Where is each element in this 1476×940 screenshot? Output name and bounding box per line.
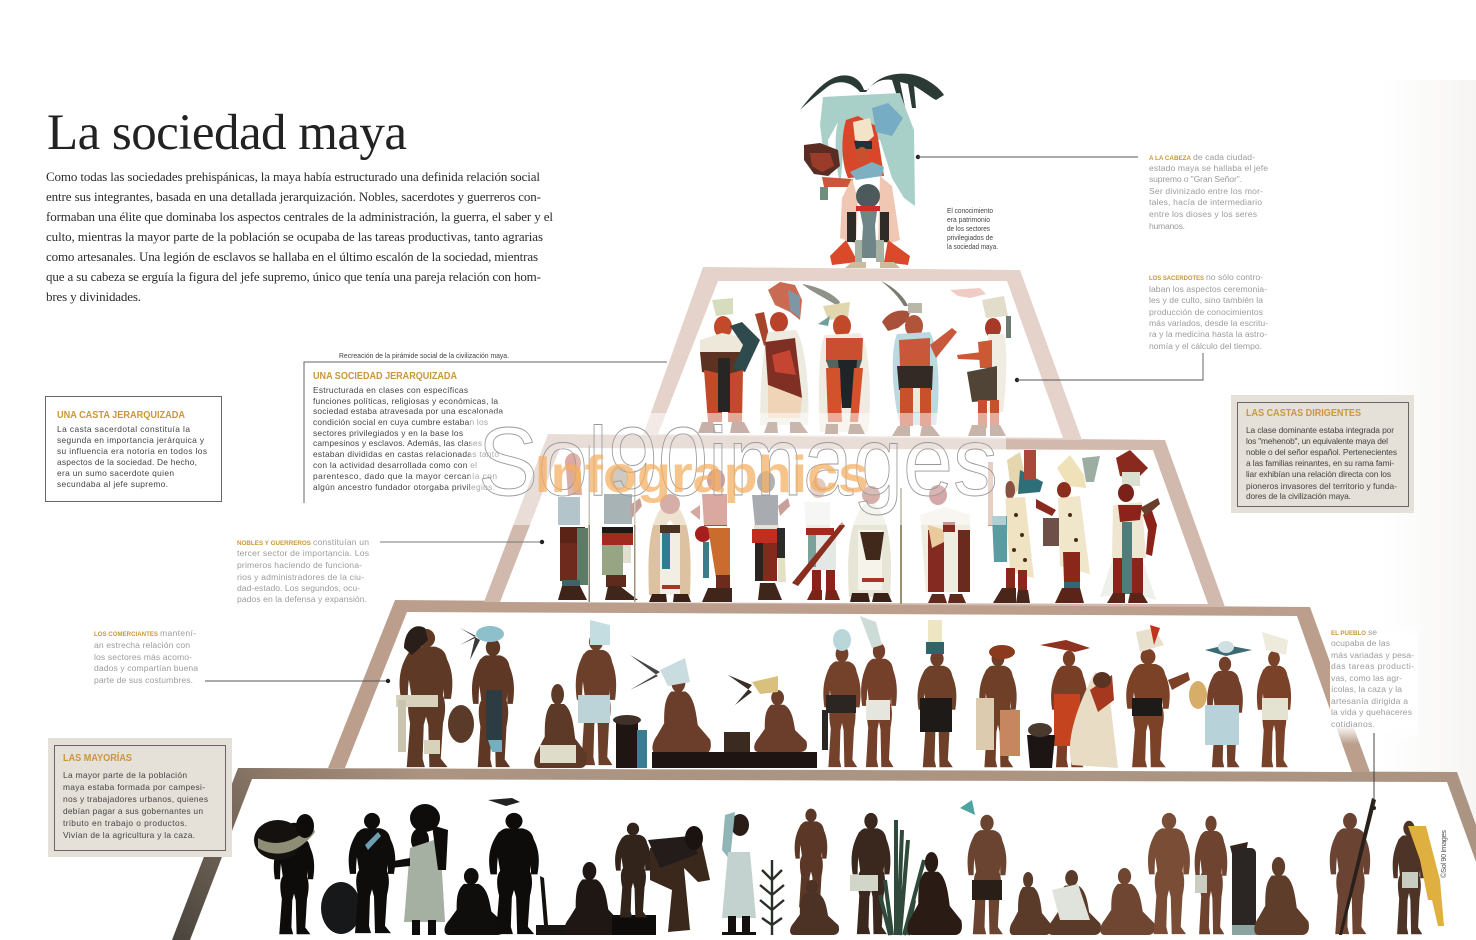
standing man 5 — [1126, 625, 1190, 767]
nobles and warriors row — [558, 445, 1160, 604]
panel: las castas dirigentes: los "mehenob", un equivalente maya del — [1246, 436, 1388, 446]
callout: a la cabeza: estado maya se hallaba el jefe — [1149, 163, 1268, 173]
standing man 6 — [1189, 641, 1252, 767]
merchant 2 — [460, 626, 514, 767]
callout: el pueblo: EL PUEBLO — [1331, 630, 1366, 637]
callout: los sacerdotes: laban los aspectos ceremonia- — [1149, 284, 1267, 294]
caption: conocimiento: privilegiados de — [947, 233, 993, 242]
common people row — [254, 798, 1444, 935]
intro paragraph: que a su cabeza se erguía la figura del jefe supremo, único que tenía una pareja relación con hom- — [46, 269, 541, 284]
watermark: Infographics: Infographics — [535, 446, 869, 504]
callout: a la cabeza: A LA CABEZA — [1149, 155, 1191, 162]
copyright credit: ©Sol 90 Images — [1439, 830, 1448, 878]
callout: los sacerdotes: LOS SACERDOTES — [1149, 275, 1204, 282]
caption: conocimiento: era patrimonio — [947, 215, 990, 224]
seated man 2 — [1100, 868, 1155, 935]
caption: conocimiento — [947, 206, 998, 251]
panel: una casta jerarquizada: era un sumo sacerdote quien — [57, 468, 174, 478]
noble 1 — [558, 445, 590, 602]
corn plant — [760, 860, 784, 935]
agave plant — [880, 820, 924, 935]
kneeling man at stele — [1254, 857, 1309, 935]
panel: una casta jerarquizada: secundaba al jefe supremo. — [57, 479, 168, 489]
woman with red skirt — [1040, 640, 1090, 767]
standing man 7 — [1257, 632, 1291, 767]
callout: nobles y guerreros — [237, 537, 544, 604]
priest 2 — [755, 282, 808, 433]
panel: las mayorías: nos y trabajadores urbanos, quienes — [63, 794, 208, 804]
panel: las castas dirigentes: noble o del señor español. Pertenecientes — [1246, 447, 1397, 457]
panel: las castas dirigentes: liar exhibían una relación directa con los — [1246, 469, 1391, 479]
panel: una sociedad jerarquizada: condición social en cuya cumbre estaban los — [313, 417, 488, 427]
callout: el pueblo: ocupaba de las — [1331, 638, 1390, 648]
panel: una sociedad jerarquizada: Estructurada en clases con específicas — [313, 385, 468, 395]
panel: las mayorías: Vivían de la agricultura y la caza. — [63, 830, 195, 840]
panel: las castas dirigentes: pioneros invasores del territorio y funda- — [1246, 481, 1397, 491]
standing man with bowl — [1195, 816, 1248, 934]
callout: los sacerdotes: ra y la medicina hasta la astro- — [1149, 329, 1267, 339]
woman with jar — [388, 804, 448, 935]
priests row — [698, 281, 1011, 436]
bending porter — [648, 826, 710, 932]
panel: las mayorías: LAS MAYORÍAS — [63, 751, 132, 764]
callout: nobles y guerreros: primeros haciendo de funciona- — [237, 560, 362, 570]
porter with basket — [254, 814, 315, 934]
callout: a la cabeza: Ser divinizado entre los mor- — [1149, 186, 1263, 196]
priest 4 — [881, 281, 957, 436]
panel: una sociedad jerarquizada: estaban divididas en castas relacionadas tanto — [313, 449, 499, 459]
panel: una sociedad jerarquizada: algún ancestro fundador otorgaba privilegios. — [313, 482, 495, 492]
callout: a la cabeza — [916, 152, 1268, 231]
callout: el pueblo: más variadas y pesa- — [1331, 650, 1414, 660]
man and crouching farmer — [790, 809, 839, 935]
standing man 2 — [860, 616, 897, 767]
kneeling farmer — [907, 852, 962, 935]
callout: los sacerdotes: más variados, desde la escritu- — [1149, 318, 1268, 328]
panel: las mayorías — [48, 738, 232, 857]
panel: una sociedad jerarquizada: UNA SOCIEDAD JERARQUIZADA — [313, 371, 457, 382]
intro paragraph: culto, mientras la mayor parte de la población se ocupaba de las tareas productivas, tanto agrarias — [46, 229, 543, 244]
panel: una sociedad jerarquizada: sociedad estaba atravesada por una escalonada — [313, 406, 503, 416]
callout: el pueblo: artesanía dirigida a — [1331, 696, 1408, 706]
standing man 4 — [976, 645, 1020, 767]
callout: el pueblo: se — [1368, 627, 1377, 637]
panel: las castas dirigentes: dores de la civilización maya. — [1246, 491, 1351, 501]
man with sack — [321, 813, 395, 934]
noble 4 — [690, 469, 732, 602]
priest 3 — [802, 284, 870, 434]
callout: el pueblo: das tareas producti- — [1331, 661, 1414, 671]
intro paragraph: entre sus integrantes, basada en una detallada jerarquización. Nobles, sacerdotes y guerreros con- — [46, 189, 541, 204]
stele — [1232, 848, 1258, 935]
callout: el pueblo — [1330, 622, 1418, 810]
panel: las mayorías: tributo en trabajo o productos. — [63, 818, 187, 828]
noble 11 — [1100, 450, 1160, 603]
man from behind — [960, 800, 1006, 934]
callout: los sacerdotes: producción de conocimientos — [1149, 307, 1263, 317]
intro paragraph: formaban una élite que dominaba los aspectos centrales de la administración, la guerra, el saber y el — [46, 209, 553, 224]
noble 3 — [648, 494, 691, 602]
panel: una sociedad jerarquizada — [304, 351, 667, 503]
noble 8 — [920, 485, 970, 603]
callout: nobles y guerreros: pados en la defensa y expansión. — [237, 594, 367, 604]
watermark: Sol90images: Sol90images — [478, 407, 998, 516]
noble 5 — [752, 471, 790, 600]
callout: los comerciantes — [94, 628, 390, 685]
panel: una sociedad jerarquizada: con la actividad desarrollada como con el — [313, 460, 477, 470]
panel: una casta jerarquizada: La casta sacerdotal constituía la — [57, 424, 190, 434]
panel: una sociedad jerarquizada: Recreación de la pirámide social de la civilización maya. — [339, 351, 509, 360]
man with hoe — [488, 798, 568, 935]
callout: los sacerdotes — [1015, 272, 1268, 382]
watermark veil — [470, 413, 1006, 525]
panel: las mayorías: La mayor parte de la población — [63, 770, 187, 780]
callout: el pueblo: vas, como las agr- — [1331, 673, 1402, 683]
caption: conocimiento: la sociedad maya. — [947, 242, 998, 251]
noble 2 — [602, 466, 642, 602]
priest 5 — [950, 288, 1011, 436]
callout: nobles y guerreros: rios y administradores de la ciu- — [237, 572, 364, 582]
callout: los sacerdotes: nomía y el cálculo del tiempo. — [1149, 341, 1262, 351]
standing man with vessel — [1148, 813, 1190, 934]
callout: los comerciantes: dados y compartían buena — [94, 663, 198, 673]
callout: los comerciantes: mantení- — [160, 628, 196, 638]
panel: una sociedad jerarquizada: sectores privilegiados y en la base los — [313, 428, 463, 438]
table — [652, 752, 817, 768]
merchant with drum — [396, 626, 474, 767]
callout: a la cabeza: de cada ciudad- — [1193, 152, 1255, 162]
panel: una casta jerarquizada: segunda en importancia jerárquica y — [57, 435, 205, 445]
panel: una sociedad jerarquizada: parentesco, dado que la mayor cercanía con — [313, 471, 497, 481]
seated man — [1010, 872, 1051, 935]
callout: los comerciantes: parte de sus costumbres. — [94, 675, 193, 685]
caption: conocimiento: El conocimiento — [947, 206, 993, 215]
title: La sociedad maya — [47, 105, 407, 161]
panel: una casta jerarquizada: su influencia era notoria en todos los — [57, 446, 207, 456]
man carrying jaguar pelt — [1393, 821, 1444, 934]
pyramid frame — [172, 267, 1476, 940]
callout: los comerciantes: an estrecha relación con — [94, 640, 190, 650]
callout: el pueblo: la vida y quehaceres — [1331, 707, 1412, 717]
panel: las castas dirigentes — [1231, 395, 1414, 513]
intro paragraph: Como todas las sociedades prehispánicas, la maya había estructurado una definida relación social — [46, 169, 540, 184]
callout: el pueblo: cotidianos. — [1331, 719, 1375, 729]
callout: el pueblo: ícolas, la caza y la — [1331, 684, 1402, 694]
panel: las mayorías: maya estaba formada por campesi- — [63, 782, 205, 792]
intro paragraph: como artesanales. Una legión de esclavos se hallaba en el último escalón de la sociedad, mientras — [46, 249, 538, 264]
caption: conocimiento: de los sectores — [947, 224, 990, 233]
panel: una casta jerarquizada: UNA CASTA JERARQUIZADA — [57, 410, 185, 421]
seated scribe 2 — [724, 675, 807, 752]
pillar — [613, 715, 647, 768]
standing worker — [615, 823, 651, 917]
callout: los comerciantes: los sectores más acomo- — [94, 652, 192, 662]
jar — [1027, 723, 1055, 768]
standing man 1 — [822, 629, 861, 767]
intro paragraph — [46, 169, 553, 304]
noble 10 — [1036, 455, 1100, 603]
seated woman — [445, 868, 505, 935]
callout: nobles y guerreros: dad-estado. Los segundos, ocu- — [237, 583, 360, 593]
callout: nobles y guerreros: tercer sector de importancia. Los — [237, 548, 369, 558]
callout: los comerciantes: LOS COMERCIANTES — [94, 631, 158, 638]
panel: una casta jerarquizada — [46, 396, 222, 502]
man with spear — [1330, 798, 1376, 935]
woman in white dress — [722, 812, 756, 935]
supreme lord figure — [800, 74, 944, 268]
crouching man — [564, 862, 656, 935]
kneeling woman — [1070, 672, 1118, 768]
callout: a la cabeza: entre los dioses y los seres — [1149, 209, 1257, 219]
callout: a la cabeza: supremo o "Gran Señor". — [1149, 174, 1242, 184]
kneeling merchant and standing figure — [534, 620, 616, 768]
panel: una casta jerarquizada: aspectos de la sociedad. De hecho, — [57, 457, 197, 467]
noble 9 — [988, 450, 1043, 603]
standing man 3 — [918, 620, 956, 767]
panel: las castas dirigentes: LAS CASTAS DIRIGENTES — [1246, 408, 1361, 419]
callout: a la cabeza: humanos. — [1149, 221, 1185, 231]
seated woman in white — [1048, 870, 1101, 935]
merchants and people row — [396, 616, 1291, 768]
panel: las castas dirigentes: La clase dominante estaba integrada por — [1246, 425, 1394, 435]
noble 6 — [792, 478, 845, 600]
seated scribe 1 — [630, 655, 711, 754]
intro paragraph: bres y divinidades. — [46, 289, 141, 304]
callout: los sacerdotes: les y de culto, sino también la — [1149, 295, 1263, 305]
callout: nobles y guerreros: constituían un — [313, 537, 369, 547]
panel: las castas dirigentes: a las familias reinantes, en su rama fami- — [1246, 458, 1394, 468]
panel: las mayorías: debían pagar a sus gobernantes un — [63, 806, 203, 816]
panel: una sociedad jerarquizada: funciones políticas, religiosas y económicas, la — [313, 396, 498, 406]
man at agave — [850, 813, 890, 934]
panel: una sociedad jerarquizada: campesinos y esclavos. Además, las clases — [313, 438, 482, 448]
callout: nobles y guerreros: NOBLES Y GUERREROS — [237, 540, 311, 547]
priest 1 — [698, 298, 760, 433]
noble 7 — [848, 486, 902, 604]
callout: los sacerdotes: no sólo contro- — [1206, 272, 1263, 282]
callout: a la cabeza: tales, hacía de intermediario — [1149, 197, 1262, 207]
